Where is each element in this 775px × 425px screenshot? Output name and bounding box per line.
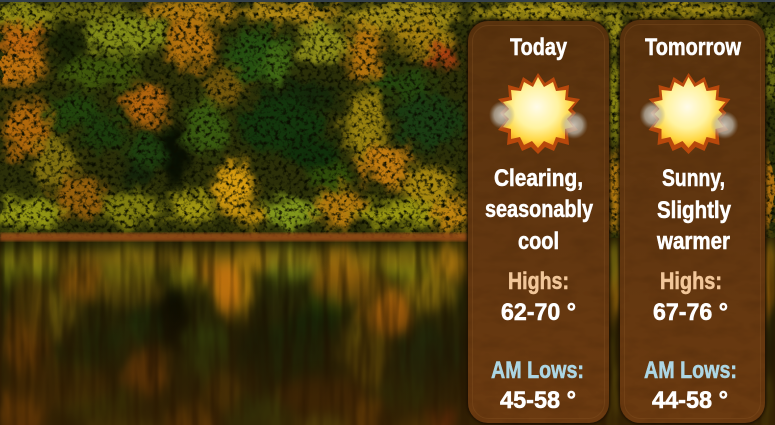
panel body: today [468, 21, 609, 423]
icon: sun with clouds, today [489, 73, 588, 154]
panel: today [466, 20, 610, 424]
highs: today: Highs: [508, 268, 569, 295]
panel: tomorrow [618, 18, 766, 424]
forecast text: tomorrow: Sunny, [662, 165, 725, 192]
top edge line [0, 0, 775, 2]
cloud right [560, 111, 588, 139]
heading: tomorrow: Tomorrow [645, 34, 741, 61]
highs: tomorrow: 67-76 ° [653, 299, 728, 326]
forecast text: tomorrow: warmer [656, 228, 730, 255]
lake reflection [0, 238, 775, 425]
lows: today [491, 357, 584, 414]
forecast text: today: cool [518, 228, 559, 255]
forest on the shore [0, 0, 775, 240]
forecast text: tomorrow: Slightly [657, 197, 732, 224]
highs: today: 62-70 ° [501, 299, 576, 326]
forecast text: today: Clearing, [494, 165, 583, 192]
cloud left [489, 101, 515, 129]
icon: sun with clouds, tomorrow [640, 73, 738, 154]
highs: tomorrow [653, 268, 728, 326]
lows: tomorrow: 44-58 ° [652, 387, 728, 414]
forecast text: today [485, 165, 594, 255]
panel body: tomorrow [620, 20, 765, 423]
forecast text: today: seasonably [485, 196, 594, 223]
cloud left [640, 101, 666, 129]
forecast text: tomorrow [656, 165, 732, 255]
reflected light patches [0, 243, 775, 413]
shoreline [0, 233, 468, 241]
cloud right [710, 111, 738, 139]
lows: today: AM Lows: [491, 357, 584, 384]
heading: today: Today [510, 34, 568, 61]
lows: tomorrow [644, 357, 737, 414]
highs: tomorrow: Highs: [660, 268, 722, 295]
lows: tomorrow: AM Lows: [644, 357, 737, 384]
lows: today: 45-58 ° [500, 387, 576, 414]
highs: today [501, 268, 576, 326]
